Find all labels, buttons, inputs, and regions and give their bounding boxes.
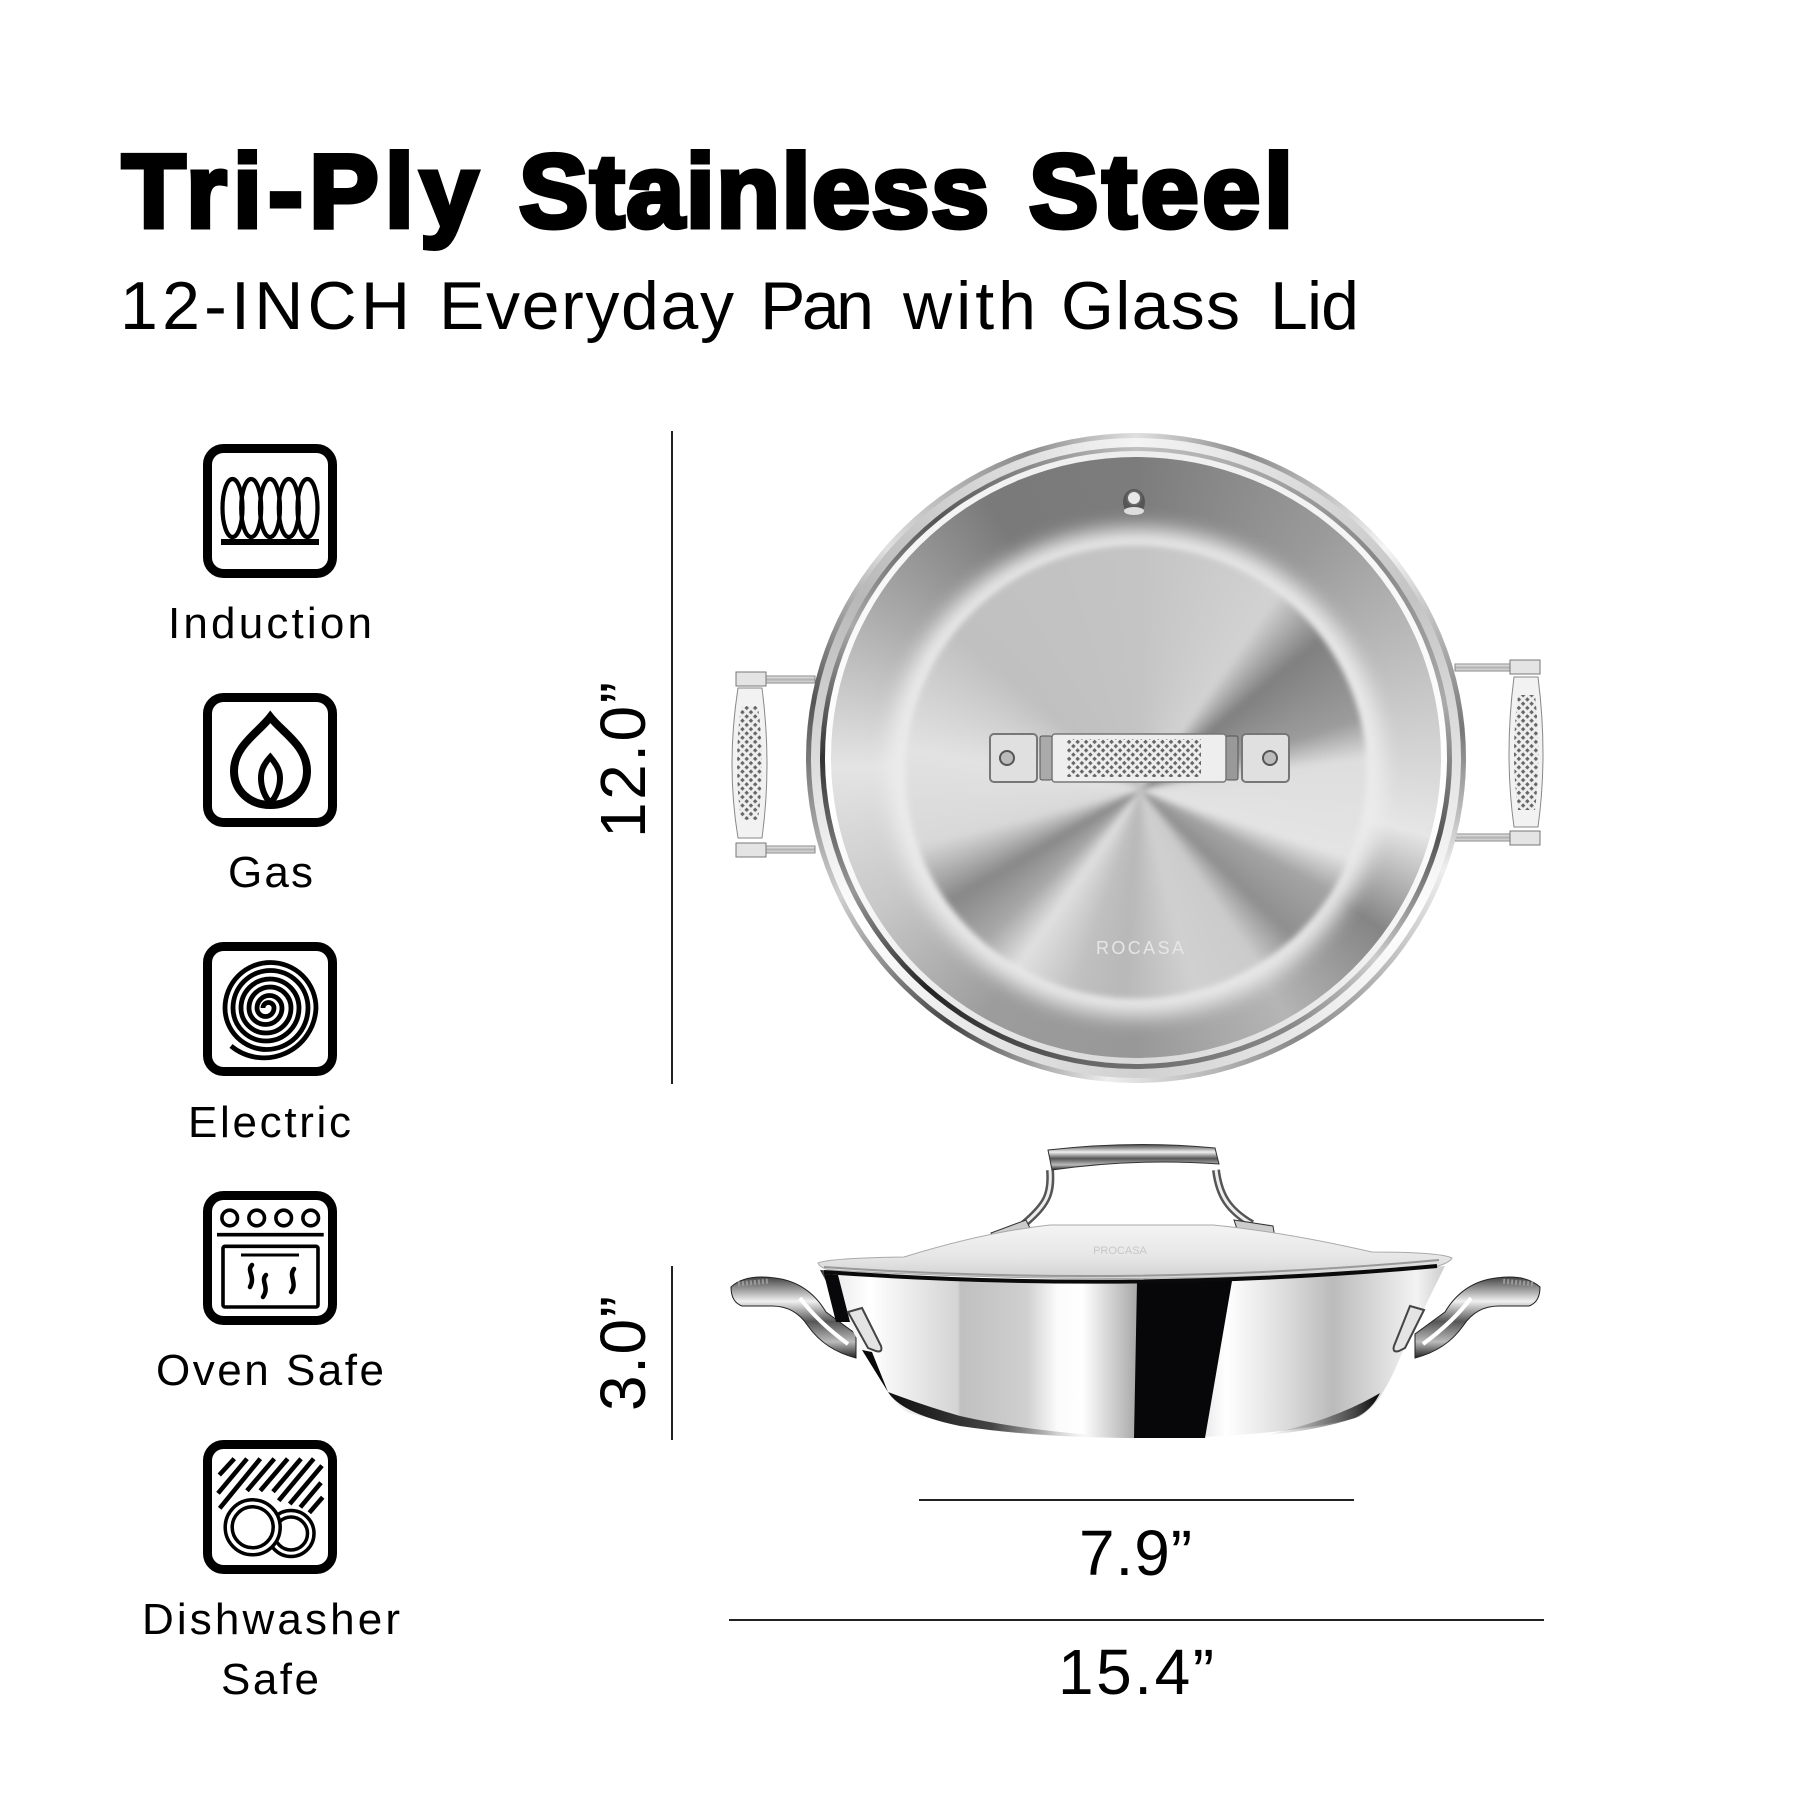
height dimension: 12.0 inch: 12.0” (587, 682, 659, 838)
subtitle (120, 268, 1359, 344)
lid handle, top view (990, 734, 1289, 782)
subtitle: Lid (1270, 268, 1359, 344)
icon: gas flame (208, 698, 332, 822)
subtitle: 12-INCH (120, 268, 410, 344)
label: Dishwasher Safe: Safe (221, 1655, 319, 1704)
label: Induction: Induction (168, 599, 372, 648)
icon: oven (208, 1196, 332, 1320)
bottom ring highlight (888, 528, 1384, 1016)
label: Electric: Electric (188, 1098, 351, 1147)
rim line (824, 1266, 1437, 1282)
height dimension: 3.0 inch: 3.0” (587, 1296, 659, 1411)
label: Gas: Gas (228, 848, 313, 897)
rim light band (811, 438, 1461, 1078)
icon: induction (208, 448, 332, 574)
lid handle, side view (991, 1144, 1275, 1238)
outer rim (806, 433, 1466, 1083)
overall width dimension: 15.4 inch: 15.4” (1058, 1636, 1214, 1708)
glass edge (825, 451, 1447, 1064)
brand mark: ROCASA (1096, 938, 1184, 958)
black reflection bands (824, 1274, 1380, 1438)
label: Oven Safe: Oven Safe (156, 1346, 384, 1395)
subtitle: Glass (1061, 268, 1240, 344)
title: Steel (1029, 134, 1293, 250)
label: Dishwasher Safe: Dishwasher (142, 1595, 400, 1644)
icon: dishwasher (208, 1444, 332, 1570)
pan base disc with brushed sectors (905, 545, 1367, 999)
label: Dishwasher Safe (142, 1595, 400, 1704)
subtitle: with (902, 268, 1036, 344)
right handle, side view (1415, 1277, 1540, 1358)
handle brackets (848, 1306, 1424, 1351)
pan side handles, top view (732, 660, 1544, 858)
glass lid dome (818, 1225, 1452, 1279)
steam vent knob (1123, 489, 1145, 515)
icon: electric coil (208, 946, 332, 1072)
title: Stainless (519, 134, 989, 250)
left handle, side view (731, 1277, 856, 1358)
title: Tri-Ply (122, 134, 478, 250)
interior wall (831, 457, 1441, 1058)
base width dimension: 7.9 inch: 7.9” (1079, 1517, 1192, 1589)
rim dark band (820, 447, 1452, 1069)
pan body (820, 1266, 1445, 1438)
brand on lid: PROCASA (1093, 1245, 1148, 1257)
subtitle: Pan (760, 268, 874, 344)
pan side view (731, 1144, 1540, 1438)
subtitle: Everyday (439, 268, 734, 344)
lid details: knob, handle, brand (989, 489, 1290, 958)
title (122, 134, 1293, 250)
pan top view photo (732, 433, 1544, 1083)
